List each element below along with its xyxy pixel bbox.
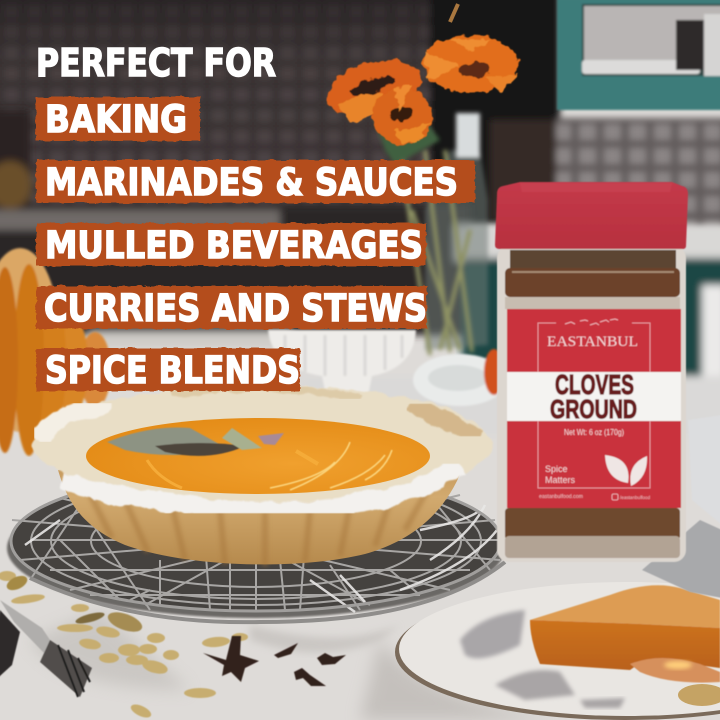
pie crust side bbox=[58, 430, 465, 564]
tagline: Spice bbox=[545, 464, 568, 474]
pumpkin bbox=[0, 248, 111, 456]
vase and stems bbox=[400, 113, 488, 355]
product name: GROUND bbox=[550, 394, 637, 424]
instagram bbox=[612, 494, 650, 500]
tagline: Matters bbox=[545, 475, 576, 485]
marble table shading bbox=[0, 455, 720, 720]
flowers bbox=[321, 4, 518, 165]
heading: perfect for: PERFECT FOR bbox=[36, 41, 276, 85]
tagline bbox=[545, 464, 576, 485]
ground cloves upper bbox=[505, 250, 680, 309]
flower: right bbox=[422, 35, 518, 93]
pumpkin pie bbox=[33, 385, 493, 566]
banner: spice blends: SPICE BLENDS bbox=[45, 349, 300, 392]
product jar bbox=[495, 182, 688, 562]
banner: curries and stews: CURRIES AND STEWS bbox=[44, 287, 427, 330]
product name: CLOVES bbox=[555, 369, 634, 400]
serving plate with cake slice bbox=[395, 582, 720, 720]
fork bbox=[0, 600, 92, 697]
website: eastanbulfood.com bbox=[539, 494, 583, 500]
net weight: Net Wt: 6 oz (170g) bbox=[564, 428, 624, 437]
cake slice bbox=[530, 585, 720, 683]
flower: left bbox=[321, 50, 427, 126]
banner: mulled beverages: MULLED BEVERAGES bbox=[45, 224, 423, 267]
pumpkin seeds bbox=[0, 571, 248, 720]
product name bbox=[550, 369, 637, 424]
brand logo bbox=[547, 319, 638, 350]
bay leaves bbox=[107, 428, 284, 456]
pie filling bbox=[86, 418, 430, 494]
star anise and cloves bbox=[203, 636, 346, 686]
cooling rack bbox=[7, 470, 505, 622]
white bowl bbox=[268, 330, 416, 396]
flower: lower bbox=[372, 84, 432, 144]
ground cloves lower bbox=[505, 508, 680, 558]
jar lid bbox=[495, 182, 688, 249]
product label bbox=[507, 309, 681, 508]
banner: baking: BAKING bbox=[45, 98, 187, 141]
brand logo: EASTANBUL bbox=[547, 334, 638, 350]
tissue at right bbox=[642, 415, 720, 598]
small plate and tomato bbox=[413, 349, 507, 406]
instagram: /eastanbulfood bbox=[620, 495, 650, 500]
jar body bbox=[497, 246, 686, 562]
icon: leaves bbox=[605, 455, 647, 486]
teal cabinet bbox=[557, 0, 720, 110]
banner: marinades and sauces: MARINADES & SAUCES bbox=[45, 161, 458, 204]
pie rim bbox=[33, 385, 493, 503]
